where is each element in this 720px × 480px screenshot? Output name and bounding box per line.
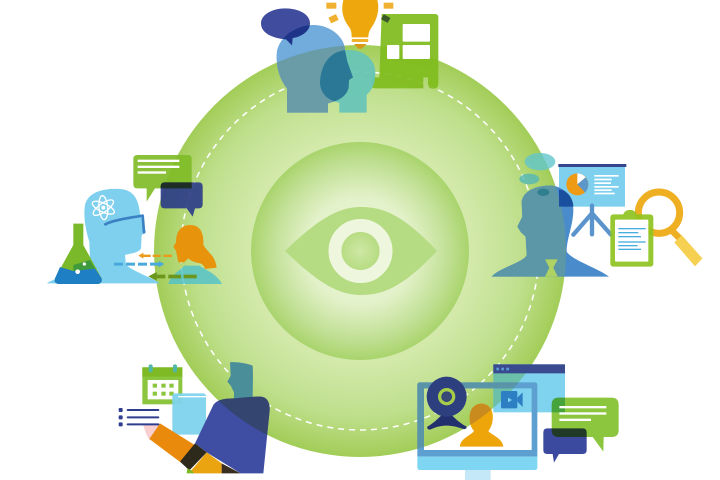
group: top ideas and collaboration [261, 0, 438, 113]
icon: presenter silhouette [492, 186, 609, 277]
icon: woman on screen [460, 404, 503, 447]
icon: large head [276, 25, 345, 113]
arrow: orange dashes [138, 253, 172, 259]
icon: wrist band [180, 443, 207, 470]
icon: person body [195, 397, 270, 473]
icon: navy speech bubble [543, 428, 587, 463]
chart text lines [594, 175, 619, 194]
icon: teal head [320, 50, 375, 113]
icon: presentation board [558, 164, 626, 207]
icon: calendar [142, 364, 182, 404]
dashed orbit ring [181, 72, 539, 430]
group: planning person [119, 362, 270, 473]
icon: glasses [105, 216, 144, 232]
icon: browser window [493, 364, 565, 412]
group: presenter analysis [492, 153, 702, 277]
icon: clipboard [610, 210, 653, 267]
group: scientist conversation [47, 155, 222, 284]
outer green circle [154, 45, 566, 457]
icon: thought bubbles [519, 153, 555, 184]
icon: green board [372, 14, 438, 89]
group: video conference [417, 364, 619, 480]
icon: person head [227, 362, 253, 405]
icon: easel stand [573, 206, 611, 235]
icon: atom [91, 195, 116, 220]
icon: sleeve lower [192, 452, 222, 473]
icon: scientist head [47, 189, 160, 283]
arrow: blue dashes [114, 261, 164, 267]
icon: video camera [501, 391, 523, 408]
icon: navy speech bubble [161, 182, 203, 217]
icon: central eye [285, 207, 437, 295]
board panels [381, 14, 430, 59]
inner green circle [251, 142, 469, 360]
icon: pointing hand [143, 423, 160, 440]
icon: checklist [119, 408, 159, 426]
icon: webcam [427, 377, 467, 430]
icon: light bulb [326, 0, 393, 49]
head highlight [559, 189, 573, 207]
icon: bow tie [545, 259, 558, 277]
icon: brain spot [537, 189, 549, 196]
icon: navy speech bubble [261, 8, 310, 45]
icon: green speech bubble [133, 155, 192, 202]
head overlap profile [320, 50, 353, 102]
icon: green speech bubble [552, 398, 619, 452]
icon: magnifying glass [638, 192, 702, 266]
icon: flask [55, 224, 102, 284]
icon: pie chart [566, 173, 588, 195]
icon: woman profile [168, 225, 222, 284]
icon: monitor [417, 382, 537, 480]
sleeve overlap [222, 463, 241, 473]
icon: browser window [172, 393, 206, 435]
bubble overlap [161, 182, 192, 188]
icon: cuff corner [187, 468, 194, 473]
speech bubble text lines [138, 160, 179, 174]
arrow: green dashes [148, 272, 197, 281]
speech bubble text lines [559, 406, 606, 421]
icon: forearm [149, 423, 197, 462]
